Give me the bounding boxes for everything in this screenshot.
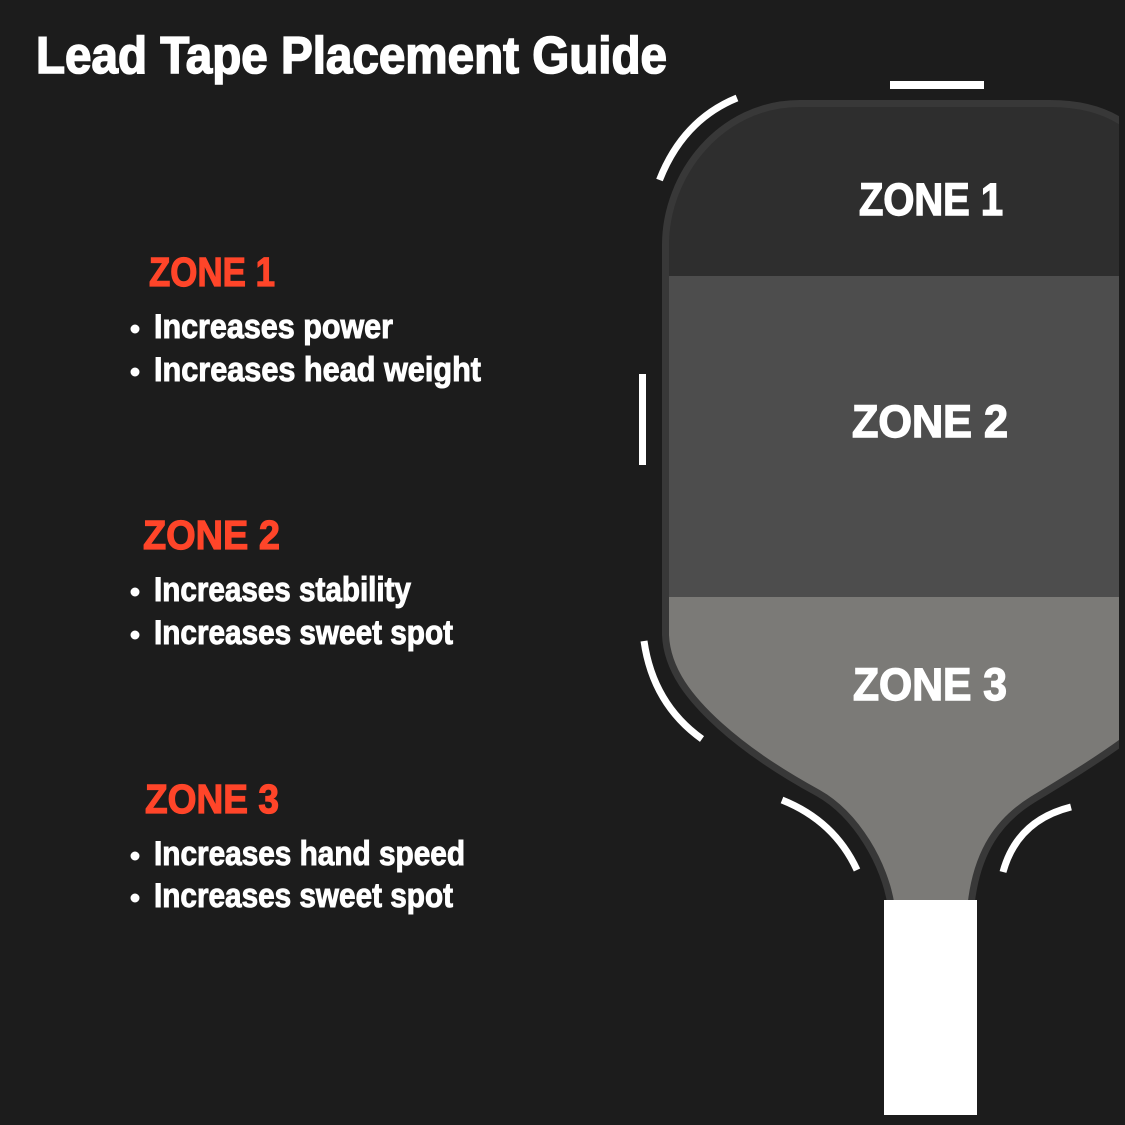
- bullet list: zone 1: Increases power: [154, 308, 393, 346]
- zone labels on paddle: ZONE 3: [853, 659, 1007, 710]
- paddle diagram: [650, 90, 1125, 1115]
- mark: lower-left curve: [644, 641, 702, 739]
- zone labels on paddle: ZONE 2: [852, 396, 1008, 447]
- mark: left throat: [782, 800, 857, 870]
- zone labels on paddle: ZONE 1: [859, 174, 1003, 225]
- heading: zone 1: ZONE 1: [149, 249, 275, 295]
- placement marks: [642, 85, 1071, 872]
- mark: left edge: [639, 374, 646, 465]
- bullet list: zone 2: Increases stability: [154, 571, 411, 609]
- bullet list: zone 1: [131, 308, 481, 389]
- heading: zone 2: ZONE 2: [143, 512, 280, 558]
- panel: zone 1 description: [131, 249, 481, 389]
- bullet list: zone 2: [131, 571, 453, 652]
- paddle face zones: [650, 90, 1125, 917]
- bullet list: zone 3: Increases sweet spot: [154, 877, 453, 915]
- zone labels on paddle: [852, 174, 1008, 710]
- mark: right throat: [1003, 807, 1071, 872]
- bullet list: zone 3: Increases hand speed: [154, 835, 465, 873]
- title: Lead Tape Placement Guide: [36, 27, 667, 85]
- panel: zone 3 description: [131, 776, 465, 915]
- heading: zone 3: ZONE 3: [145, 776, 279, 822]
- bullet list: zone 2: Increases sweet spot: [154, 614, 453, 652]
- bullet list: zone 3: [131, 835, 465, 915]
- mark: top edge: [890, 81, 984, 89]
- mark: top-left corner: [660, 98, 737, 180]
- handle grip: [884, 900, 977, 1115]
- panel: zone 2 description: [131, 512, 453, 652]
- bullet list: zone 1: Increases head weight: [154, 351, 481, 389]
